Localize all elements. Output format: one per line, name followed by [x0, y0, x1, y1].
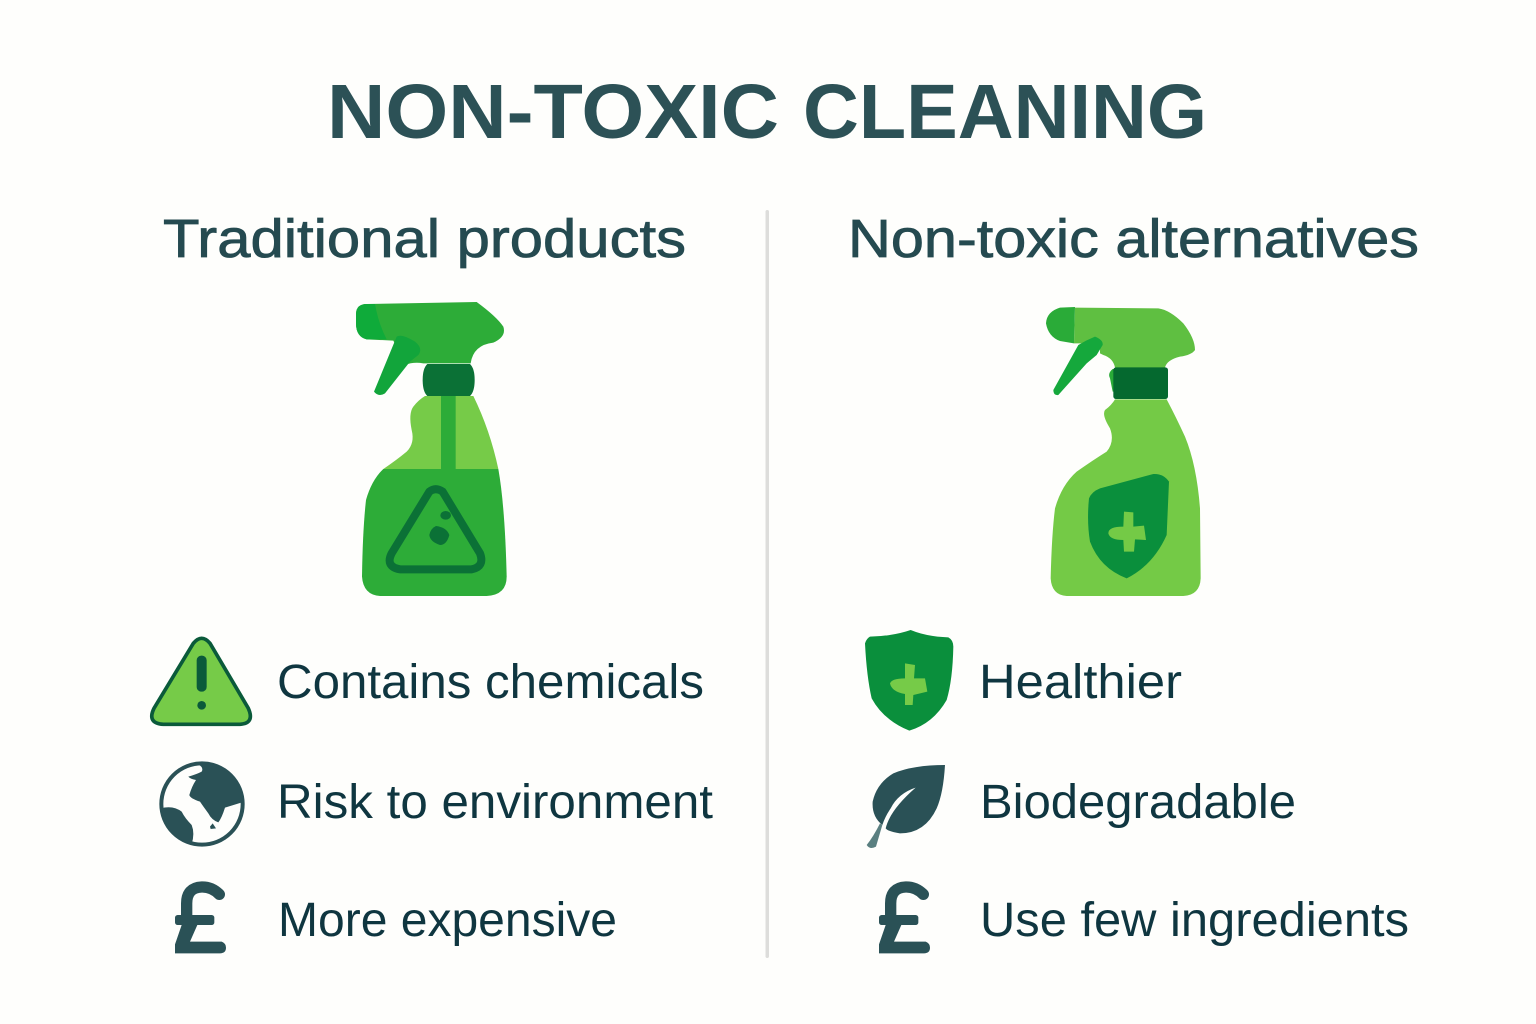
icon: globe [161, 763, 243, 845]
icon: pound sign [175, 887, 226, 953]
icon: warning triangle [152, 638, 250, 724]
list item: more expensive [175, 887, 617, 953]
list item: use few ingredients [879, 887, 1409, 953]
label: Biodegradable [980, 776, 1296, 829]
label: Risk to environment [277, 776, 713, 829]
title: NON-TOXIC [327, 69, 779, 155]
icon: traditional spray bottle [356, 302, 507, 596]
title [327, 69, 1207, 155]
list item: healthier [865, 630, 1182, 731]
heading: non-toxic alternatives: Non-toxic alternatives [848, 209, 1419, 269]
list item: biodegradable [867, 765, 1296, 848]
list item: contains chemicals [152, 638, 704, 724]
heading: traditional products: Traditional products [163, 209, 686, 269]
icon: non-toxic spray bottle [1046, 307, 1201, 596]
icon: leaf [867, 765, 945, 848]
label: Use few ingredients [980, 894, 1409, 947]
label: More expensive [278, 894, 617, 947]
title: CLEANING [803, 69, 1207, 155]
label: Contains chemicals [277, 656, 704, 709]
list item: risk to environment [161, 763, 713, 845]
label: Healthier [979, 656, 1182, 709]
divider [766, 210, 769, 958]
icon: shield [865, 630, 953, 731]
icon: pound sign [879, 887, 930, 953]
